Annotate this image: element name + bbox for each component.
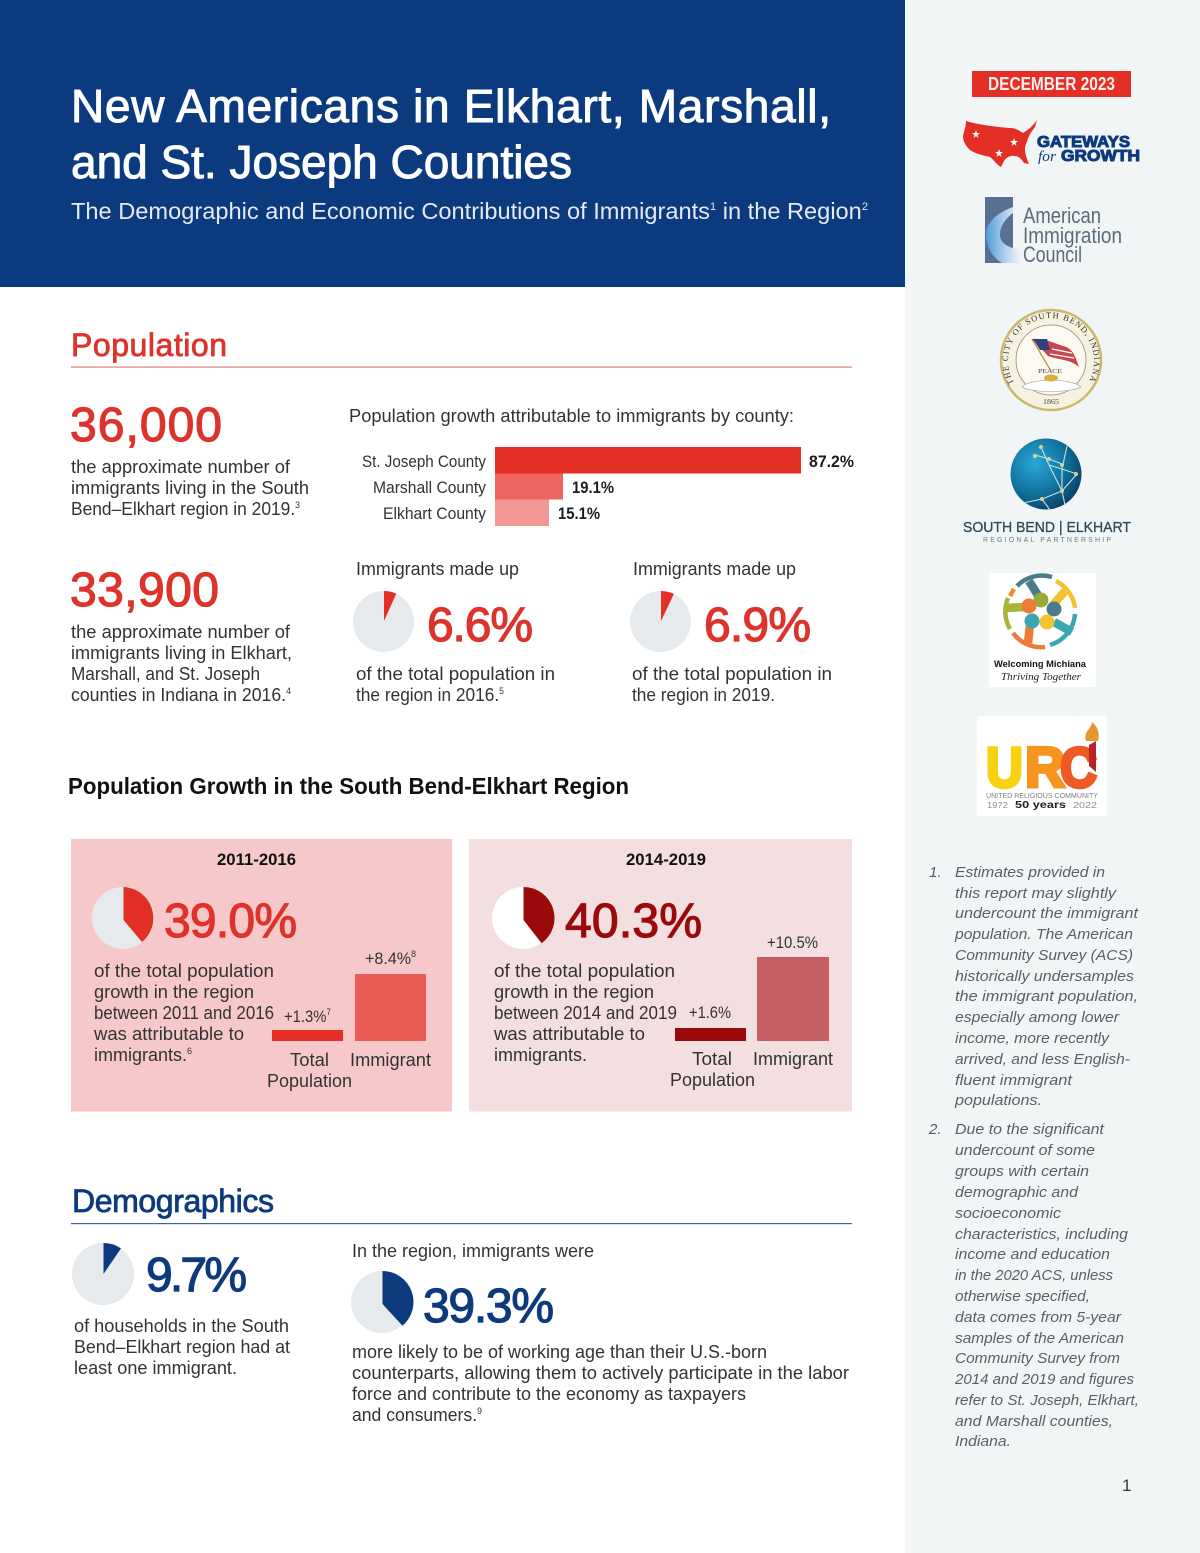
stat: 9.7 percent households: least one immigrant.	[74, 1358, 237, 1378]
stat: 9.7 percent households	[72, 1243, 290, 1378]
logo: City of South Bend seal: 1865	[1043, 397, 1059, 406]
date badge	[972, 71, 1131, 97]
bar chart: growth by county: Population growth attributable to immigrants by county:	[349, 406, 794, 426]
footnote 1: Community Survey (ACS)	[955, 947, 1133, 964]
logo: United Religious Community: UNITED RELIGIOUS COMMUNITY	[986, 793, 1098, 800]
footnote 2: in the 2020 ACS, unless	[955, 1267, 1113, 1284]
bar chart: 2014-2019 growth	[670, 934, 833, 1090]
footnote 1: Estimates provided in	[955, 864, 1105, 881]
logo: American Immigration Council	[985, 197, 1122, 267]
footnote 1: populations.	[954, 1092, 1042, 1109]
stat: 39.3 percent working age: and consumers.	[352, 1405, 480, 1425]
stat: 33,900 immigrants: the approximate number of	[71, 622, 291, 642]
pie: 40.3 percent	[492, 887, 555, 949]
panel: 2011-2016: 2011-2016	[217, 851, 296, 869]
stat: 9.7 percent households: Bend–Elkhart region had at	[74, 1337, 290, 1357]
footnote 2: Community Survey from	[955, 1350, 1120, 1367]
stat: 39.3 percent working age: 39.3%	[423, 1280, 554, 1333]
panel: 2014-2019: was attributable to	[493, 1024, 645, 1044]
bar chart: 2011-2016 growth: 8	[411, 949, 416, 959]
sidebar background	[905, 0, 1200, 1553]
stat: 39.3 percent working age: force and contribute to the economy as taxpayers	[352, 1384, 746, 1404]
footnote 1: the immigrant population,	[955, 988, 1138, 1005]
heading: demographics: Demographics	[72, 1183, 274, 1219]
bar chart: 2011-2016 growth: Population	[267, 1071, 352, 1091]
logo: American Immigration Council: American	[1023, 203, 1101, 228]
bar chart: growth by county: Elkhart County	[383, 505, 487, 523]
stat: 6.6 percent in 2016: the region in 2016.	[356, 685, 505, 705]
panel: 2011-2016: of the total population	[94, 961, 274, 981]
date badge: DECEMBER 2023	[988, 74, 1115, 94]
footnote 1: historically undersamples	[955, 968, 1135, 985]
stat: 33,900 immigrants	[70, 564, 292, 705]
footnote 2: and Marshall counties,	[955, 1413, 1113, 1430]
stat: 36,000 immigrants: Bend–Elkhart region in 2019.	[71, 499, 303, 519]
header banner	[0, 0, 905, 287]
stat: 6.6 percent in 2016: 5	[499, 686, 504, 696]
title: and St. Joseph Counties	[71, 136, 572, 188]
bar chart: 2011-2016 growth: 7	[326, 1007, 331, 1017]
stat: 36,000 immigrants: 3	[295, 500, 300, 510]
footnote 1: 1.	[929, 864, 942, 881]
footnote 1: fluent immigrant	[955, 1072, 1073, 1089]
panel: 2014-2019: growth in the region	[494, 982, 654, 1002]
stat: 9.7 percent households: 9.7%	[146, 1249, 247, 1302]
footnote 2: refer to St. Joseph, Elkhart,	[955, 1392, 1139, 1409]
stat: 36,000 immigrants: the approximate number of	[71, 457, 291, 477]
footnote 1: especially among lower	[955, 1009, 1120, 1026]
footnote 2: income and education	[955, 1246, 1110, 1263]
pie: 6.9 percent	[630, 591, 691, 652]
logo: United Religious Community: U	[986, 736, 1023, 800]
footnote 2: Due to the significant	[955, 1121, 1105, 1138]
stat: 36,000 immigrants	[70, 399, 309, 519]
subtitle: The Demographic and Economic Contributions of Immigrants	[71, 198, 707, 224]
logo: Gateways for Growth: GATEWAYS	[1037, 134, 1130, 151]
bar chart: growth by county: St. Joseph County	[362, 453, 487, 471]
panel: 2014-2019: 2014-2019	[626, 851, 706, 869]
footnote 2: socioeconomic	[955, 1205, 1062, 1222]
stat: 33,900 immigrants: counties in Indiana in 2016.	[71, 685, 290, 705]
footnote 2: otherwise specified,	[955, 1288, 1090, 1305]
logo: United Religious Community: 2022	[1073, 800, 1097, 810]
pie: 39.3 percent	[351, 1271, 414, 1333]
bar chart: growth by county: 15.1%	[558, 505, 600, 523]
stat: 6.6 percent in 2016: Immigrants made up	[356, 559, 519, 579]
logo: United Religious Community: 1972	[987, 800, 1008, 810]
stat: 6.9 percent in 2019: Immigrants made up	[633, 559, 796, 579]
panel: 2011-2016: growth in the region	[94, 982, 254, 1002]
bar chart: 2014-2019 growth: +10.5%	[767, 934, 818, 952]
panel: 2014-2019: of the total population	[494, 961, 675, 981]
bar chart: 2011-2016 growth: Immigrant	[350, 1050, 431, 1070]
bar chart: growth by county: 19.1%	[572, 479, 614, 497]
stat: 39.3 percent working age: In the region, immigrants were	[352, 1241, 594, 1261]
logo: City of South Bend seal: THE CITY OF SOUTH BEND, INDIANA	[1002, 312, 1100, 386]
logo: United Religious Community: C	[1060, 736, 1097, 800]
stat: 6.6 percent in 2016: of the total population in	[356, 664, 555, 684]
title: New Americans in Elkhart, Marshall,	[71, 80, 831, 132]
footnote 2: demographic and	[955, 1184, 1079, 1201]
panel: 2014-2019: 40.3%	[565, 895, 702, 948]
stat: 6.9 percent in 2019	[630, 559, 832, 705]
stat: 39.3 percent working age	[351, 1241, 849, 1425]
subtitle: in the Region	[716, 198, 862, 224]
stat: 33,900 immigrants: immigrants living in Elkhart,	[71, 643, 292, 663]
subtitle: 2	[862, 201, 868, 213]
logo: American Immigration Council: Council	[1023, 242, 1082, 267]
bar chart: 2011-2016 growth: Total	[290, 1050, 329, 1070]
stat: 6.9 percent in 2019: the region in 2019.	[632, 685, 775, 705]
footnote 1: arrived, and less English-	[955, 1051, 1130, 1068]
stat: 9.7 percent households: of households in the South	[74, 1316, 289, 1336]
stat: 33,900 immigrants: Marshall, and St. Joseph	[71, 664, 260, 684]
subheading: population growth: Population Growth in the South Bend-Elkhart Region	[68, 773, 629, 799]
footnote 2: samples of the American	[955, 1330, 1124, 1347]
bar chart: growth by county	[349, 406, 854, 526]
stat: 6.6 percent in 2016: 6.6%	[427, 599, 533, 652]
panel: 2011-2016: 6	[187, 1046, 192, 1056]
logo: American Immigration Council: Immigration	[1023, 223, 1122, 248]
pie: 6.6 percent	[353, 591, 414, 652]
pie: 9.7 percent	[72, 1243, 134, 1305]
footnote 1: income, more recently	[955, 1030, 1111, 1047]
pie: 39.0 percent	[92, 887, 154, 949]
logo: Gateways for Growth: GROWTH	[1061, 148, 1140, 165]
logo: United Religious Community: 50 years	[1015, 800, 1067, 811]
stat: 6.6 percent in 2016	[353, 559, 555, 705]
logo: Welcoming Michiana: Thriving Together	[1001, 672, 1081, 683]
bar chart: 2011-2016 growth	[267, 949, 431, 1091]
bar chart: growth by county: Marshall County	[373, 479, 487, 497]
logo: Welcoming Michiana	[989, 573, 1096, 687]
footnote 1: undercount the immigrant	[955, 905, 1139, 922]
stat: 6.9 percent in 2019: 6.9%	[704, 599, 811, 652]
stat: 39.3 percent working age: 9	[477, 1406, 482, 1416]
stat: 36,000 immigrants: 36,000	[70, 399, 222, 452]
panel: 2011-2016: immigrants.	[94, 1045, 187, 1065]
bar chart: 2014-2019 growth: Total	[692, 1049, 732, 1069]
footnote 2: groups with certain	[955, 1163, 1089, 1180]
footnote 1	[929, 864, 1139, 1109]
stat: 39.3 percent working age: more likely to be of working age than their U.S.-born	[352, 1342, 767, 1362]
logo: South Bend Elkhart Regional Partnership	[963, 438, 1131, 544]
footnote 1: this report may slightly	[955, 885, 1118, 902]
logo: City of South Bend seal: PEACE	[1038, 368, 1062, 375]
stat: 6.9 percent in 2019: of the total population in	[632, 664, 832, 684]
stat: 33,900 immigrants: 4	[286, 686, 291, 696]
footnote 2: characteristics, including	[955, 1226, 1129, 1243]
panel: 2011-2016: between 2011 and 2016	[94, 1003, 274, 1023]
bar chart: 2014-2019 growth: +1.6%	[689, 1004, 731, 1022]
bar chart: 2014-2019 growth: Immigrant	[753, 1049, 833, 1069]
logo: Gateways for Growth	[963, 120, 1140, 167]
panel: 2011-2016: was attributable to	[93, 1024, 244, 1044]
footnote 2: Indiana.	[955, 1433, 1011, 1450]
logo: Gateways for Growth: for	[1038, 149, 1056, 165]
page number: 1	[1122, 1476, 1131, 1495]
footnote 2: undercount of some	[955, 1142, 1095, 1159]
logo: United Religious Community: R	[1025, 736, 1065, 800]
panel: 2011-2016	[71, 839, 452, 1112]
footnote 2	[928, 1121, 1139, 1450]
logo: United Religious Community	[977, 716, 1107, 816]
bar chart: 2014-2019 growth: Population	[670, 1070, 755, 1090]
footnote 1: population. The American	[954, 926, 1133, 943]
panel: 2014-2019: between 2014 and 2019	[494, 1003, 677, 1023]
heading: population: Population	[71, 327, 227, 363]
panel: 2011-2016: 39.0%	[164, 895, 297, 948]
logo: Welcoming Michiana: Welcoming Michiana	[994, 659, 1087, 669]
panel: 2014-2019: immigrants.	[494, 1045, 587, 1065]
footnote 2: data comes from 5-year	[955, 1309, 1122, 1326]
logo: South Bend Elkhart Regional Partnership: SOUTH BEND | ELKHART	[963, 520, 1131, 536]
title	[71, 80, 831, 188]
footnote 2: 2014 and 2019 and figures	[954, 1371, 1135, 1388]
footnote 2: 2.	[928, 1121, 942, 1138]
bar chart: growth by county: 87.2%	[809, 453, 854, 471]
bar chart: 2011-2016 growth: +8.4%	[365, 950, 412, 968]
stat: 36,000 immigrants: immigrants living in the South	[71, 478, 309, 498]
bar chart: 2011-2016 growth: +1.3%	[284, 1008, 331, 1026]
stat: 39.3 percent working age: counterparts, allowing them to actively participate in the labor	[352, 1363, 849, 1383]
stat: 33,900 immigrants: 33,900	[70, 564, 219, 617]
panel: 2014-2019	[469, 839, 852, 1112]
logo: South Bend Elkhart Regional Partnership: REGIONAL PARTNERSHIP	[983, 537, 1111, 544]
subtitle: 1	[710, 201, 716, 213]
